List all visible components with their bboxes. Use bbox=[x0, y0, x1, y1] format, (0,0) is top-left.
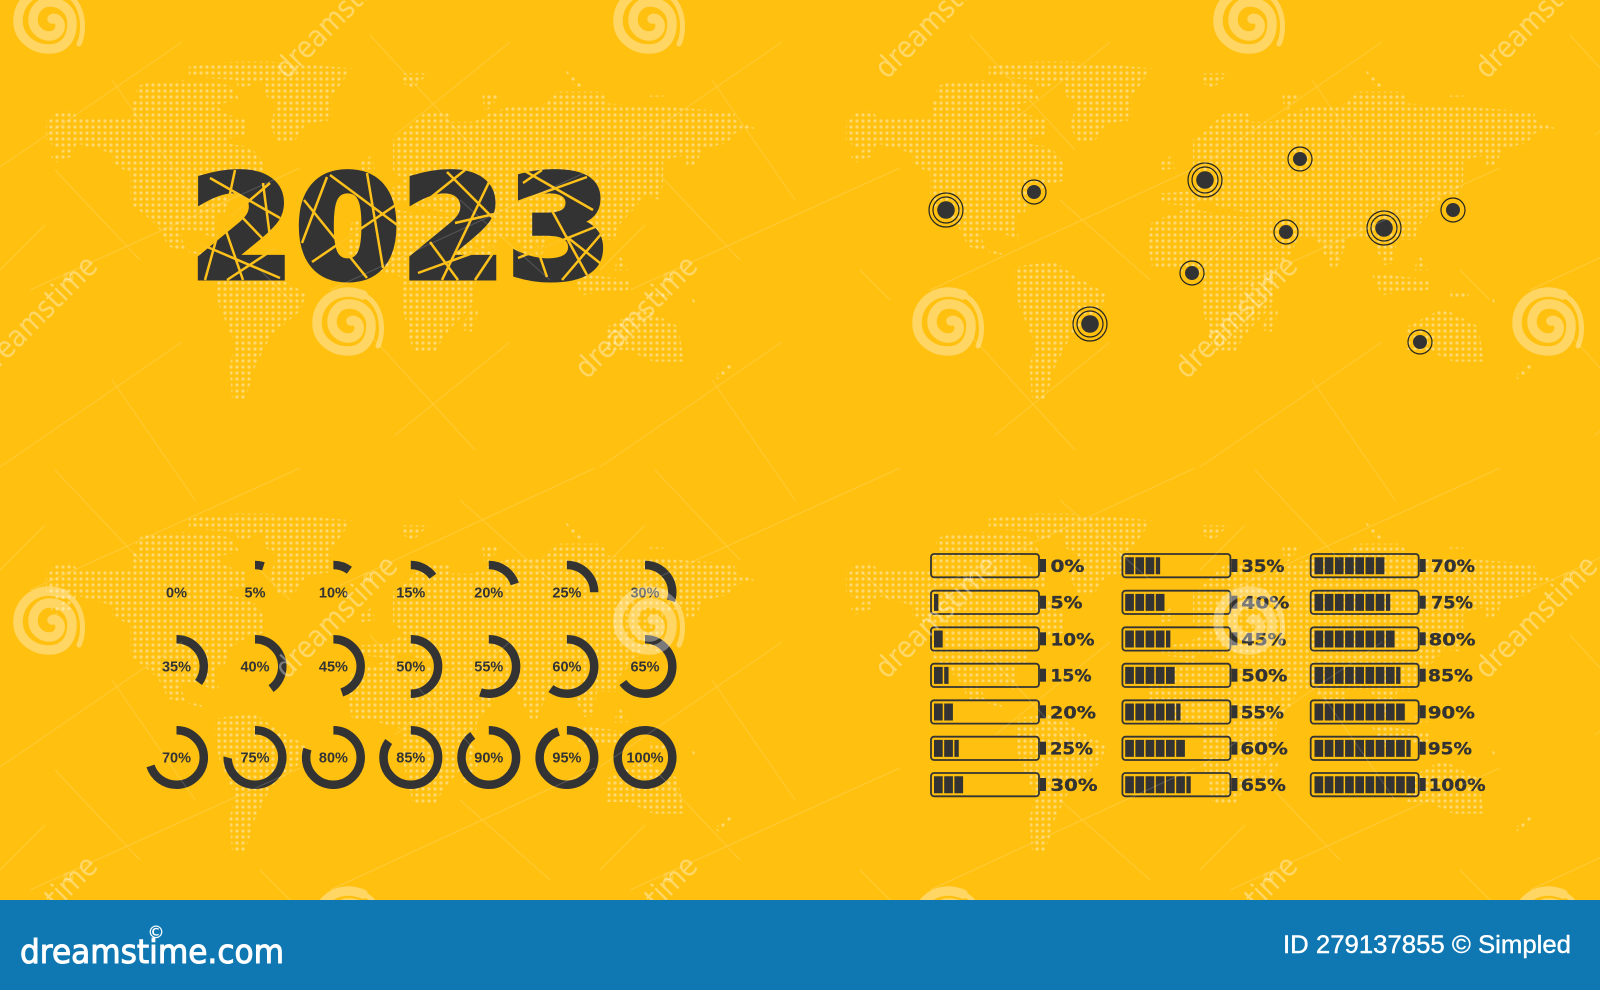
donut 10%: 10% bbox=[319, 585, 348, 601]
watermark overlay: rotated dreamstime text: © bbox=[659, 868, 679, 888]
donut 25% bbox=[540, 565, 594, 620]
footer logo: dreamstime.com: dreamstime.com bbox=[20, 932, 284, 971]
donut 80% bbox=[306, 730, 361, 785]
donut 80%: 80% bbox=[319, 750, 348, 766]
donut 100%: 100% bbox=[626, 750, 664, 766]
battery 100%: 100% bbox=[1429, 776, 1486, 796]
pin: West Africa bbox=[1180, 261, 1204, 285]
dotted world map: bottom left bbox=[46, 514, 754, 854]
battery 55% bbox=[1122, 700, 1284, 724]
donut 20%: 20% bbox=[474, 585, 503, 601]
watermark overlay: rotated dreamstime text: © bbox=[959, 568, 979, 588]
title: 2023 with cracked line pattern: 2023 bbox=[189, 146, 612, 312]
battery 75% bbox=[1311, 591, 1473, 614]
donut 70% bbox=[149, 730, 204, 785]
donut 60%: 60% bbox=[552, 660, 582, 676]
battery 80%: 80% bbox=[1429, 630, 1476, 650]
pin: South America bbox=[1073, 307, 1107, 341]
donut 90%: 90% bbox=[474, 750, 503, 766]
donut 30% bbox=[618, 565, 672, 620]
dotted world map: top right bbox=[846, 62, 1554, 402]
donut 25%: 25% bbox=[552, 585, 582, 601]
pin: East Asia bbox=[1441, 198, 1465, 222]
panel: battery level indicators bbox=[931, 554, 1486, 796]
battery 25%: 25% bbox=[1050, 740, 1093, 760]
battery 5% bbox=[931, 591, 1082, 614]
donut 35% bbox=[149, 639, 204, 694]
battery 10%: 10% bbox=[1050, 630, 1094, 650]
pin: China bbox=[1367, 211, 1401, 245]
donut 35%: 35% bbox=[162, 660, 191, 676]
watermark overlay: rotated dreamstime text: dreamstime bbox=[568, 233, 720, 386]
pin: Middle East bbox=[1274, 220, 1298, 244]
watermark overlay: rotated dreamstime text: dreamstime bbox=[1168, 233, 1320, 386]
battery 95% bbox=[1311, 737, 1472, 760]
donut 100% bbox=[618, 730, 672, 785]
watermark overlay: rotated dreamstime text: dreamstime bbox=[268, 533, 420, 686]
footer logo: dreamstime.com: © bbox=[148, 923, 164, 943]
donut 65% bbox=[618, 639, 672, 694]
battery 90% bbox=[1311, 700, 1475, 724]
battery 10% bbox=[931, 627, 1094, 651]
donut 20% bbox=[462, 565, 516, 620]
battery 100% bbox=[1311, 773, 1486, 796]
donut 15%: 15% bbox=[396, 585, 425, 601]
battery 40% bbox=[1122, 591, 1289, 614]
donut 45% bbox=[306, 639, 361, 694]
battery 75%: 75% bbox=[1431, 594, 1473, 614]
battery 55%: 55% bbox=[1241, 703, 1284, 723]
dotted world map: top left bbox=[46, 62, 754, 402]
battery 65% bbox=[1122, 773, 1286, 796]
battery 60%: 60% bbox=[1240, 740, 1288, 760]
battery 0%: 0% bbox=[1050, 557, 1084, 577]
donut 95% bbox=[540, 730, 594, 785]
donut 55%: 55% bbox=[474, 660, 503, 676]
battery 70% bbox=[1311, 554, 1475, 577]
donut 0%: 0% bbox=[166, 585, 187, 601]
battery 85% bbox=[1311, 664, 1473, 687]
watermark overlay: rotated dreamstime text: © bbox=[59, 868, 79, 888]
dotted world map: bottom right bbox=[846, 514, 1554, 854]
donut 95%: 95% bbox=[552, 750, 582, 766]
donut 30%: 30% bbox=[630, 585, 660, 601]
battery 35% bbox=[1122, 554, 1284, 577]
footer bar bbox=[0, 900, 1600, 990]
battery 45%: 45% bbox=[1241, 630, 1286, 650]
pin: Russia bbox=[1288, 147, 1312, 171]
donut 60% bbox=[540, 639, 594, 694]
donut 40%: 40% bbox=[240, 660, 270, 676]
donut 40% bbox=[228, 639, 282, 694]
donut 90% bbox=[462, 730, 516, 785]
donut 70%: 70% bbox=[162, 750, 191, 766]
donut 75%: 75% bbox=[240, 750, 270, 766]
donut 10% bbox=[306, 565, 361, 620]
watermark overlay: rotated dreamstime text: © bbox=[659, 268, 679, 288]
watermark overlay: rotated dreamstime text: dreamstime bbox=[568, 833, 720, 986]
battery 35%: 35% bbox=[1241, 557, 1284, 577]
donut 85% bbox=[384, 730, 438, 785]
battery 65%: 65% bbox=[1241, 776, 1286, 796]
pin: North America east bbox=[1022, 180, 1046, 204]
battery 50% bbox=[1122, 664, 1287, 687]
watermark overlay: rotated dreamstime text: © bbox=[359, 568, 379, 588]
watermark overlay: rotated dreamstime text: © bbox=[1259, 268, 1279, 288]
battery 25% bbox=[931, 737, 1093, 760]
donut 5%: 5% bbox=[245, 585, 266, 601]
battery 30% bbox=[931, 773, 1098, 796]
battery 0% bbox=[931, 554, 1084, 577]
battery 45% bbox=[1122, 627, 1286, 651]
donut 50%: 50% bbox=[396, 660, 425, 676]
donut 50% bbox=[384, 639, 438, 694]
donut 15% bbox=[384, 565, 438, 620]
battery 50%: 50% bbox=[1241, 667, 1287, 687]
battery 70%: 70% bbox=[1431, 557, 1475, 577]
donut 85%: 85% bbox=[396, 750, 425, 766]
pin: Europe bbox=[1188, 163, 1222, 197]
panel: location pins on world map bbox=[929, 147, 1465, 354]
pin: North America west bbox=[929, 193, 963, 227]
battery 15% bbox=[931, 664, 1092, 687]
battery 20% bbox=[931, 700, 1096, 724]
watermark overlay: rotated dreamstime text: dreamstime bbox=[1168, 833, 1320, 986]
pin: Australia bbox=[1408, 330, 1432, 354]
battery 30%: 30% bbox=[1050, 776, 1098, 796]
battery 5%: 5% bbox=[1050, 594, 1082, 614]
watermark overlay: rotated dreamstime text: © bbox=[59, 268, 79, 288]
battery 85%: 85% bbox=[1428, 667, 1473, 687]
battery 90%: 90% bbox=[1428, 703, 1475, 723]
panel: circular progress charts bbox=[149, 565, 672, 785]
donut 65%: 65% bbox=[630, 660, 660, 676]
watermark overlay: rotated dreamstime text: © bbox=[1259, 868, 1279, 888]
battery 80% bbox=[1311, 627, 1476, 651]
watermark overlay: rotated dreamstime text: dreamstime bbox=[868, 533, 1020, 686]
footer image id and credit: ID 279137855 © Simpled bbox=[1283, 931, 1571, 959]
battery 40%: 40% bbox=[1241, 594, 1289, 614]
battery 60% bbox=[1122, 737, 1288, 760]
battery 95%: 95% bbox=[1428, 740, 1472, 760]
donut 5% bbox=[228, 565, 282, 620]
watermark overlay: rotated dreamstime text: © bbox=[1559, 568, 1579, 588]
donut 55% bbox=[462, 639, 516, 694]
donut 75% bbox=[228, 730, 282, 785]
battery 20%: 20% bbox=[1050, 703, 1096, 723]
battery 15%: 15% bbox=[1050, 667, 1092, 687]
donut 45%: 45% bbox=[319, 660, 348, 676]
